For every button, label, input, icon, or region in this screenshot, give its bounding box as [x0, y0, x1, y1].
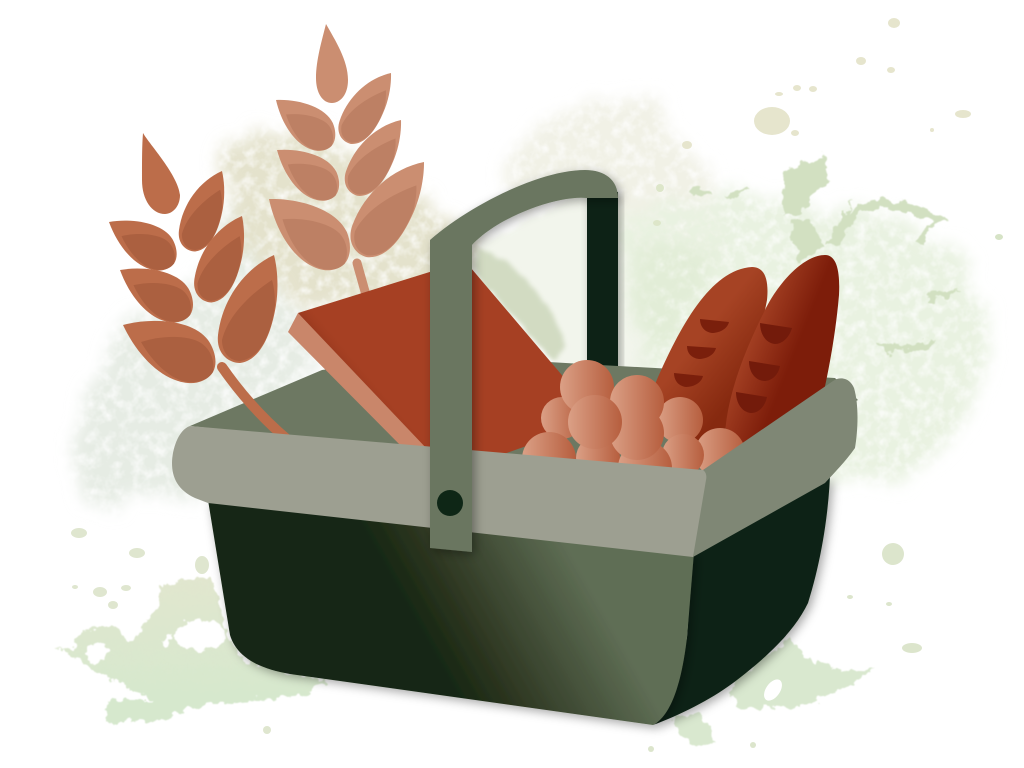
bread slice — [288, 261, 600, 480]
wash: arc behind handle — [505, 100, 730, 260]
score marks: back baguette — [674, 319, 729, 387]
wash: sage tint beside handle — [476, 248, 566, 362]
wash: pale panel under handle arch — [480, 190, 660, 370]
handle: back upright — [587, 192, 618, 377]
rim: front — [172, 426, 706, 557]
drops: lower left — [71, 528, 271, 734]
baguette: back — [640, 267, 767, 450]
rim: right side — [693, 378, 858, 557]
handle: front strap — [430, 170, 618, 552]
splatter: white holes in lower left wash — [86, 614, 226, 662]
grain leaves: right wheat — [256, 24, 427, 275]
wash: left pale cloud — [74, 200, 320, 510]
grain leaves: left wheat — [105, 133, 277, 383]
bread crust — [288, 313, 428, 450]
wash: stronger tint beside baguette — [630, 240, 720, 365]
splatter: lower left green — [57, 575, 327, 723]
bread face — [298, 261, 600, 480]
basket body: front — [208, 500, 694, 725]
stem: left wheat, over interior — [222, 367, 288, 440]
handle: rivet — [437, 490, 463, 516]
bread inner shadow — [298, 306, 445, 455]
score marks: front baguette — [736, 323, 792, 413]
stem: right wheat — [357, 263, 366, 295]
basket interior — [190, 355, 858, 480]
splatter: upper right green marks — [692, 155, 957, 356]
baguette: front — [720, 255, 839, 470]
splatter: white gap in lower right wash — [760, 676, 786, 704]
drops: upper right paint marks — [653, 18, 1003, 240]
drops: lower right paint marks — [648, 543, 922, 752]
baguettes — [640, 255, 839, 470]
basket body: right side — [653, 476, 830, 725]
wash: beige tint behind wheat — [225, 132, 480, 310]
wheat stalk: right — [256, 24, 427, 295]
wash: right pale cloud — [620, 196, 987, 485]
rolls cluster — [522, 360, 745, 495]
splatter: lower right green — [672, 640, 875, 748]
